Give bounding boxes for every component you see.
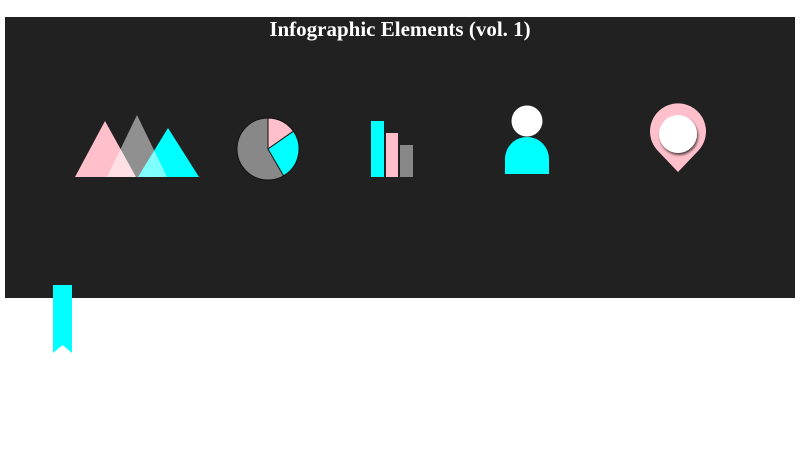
icon: pie chart <box>237 118 299 180</box>
title: Infographic Elements (vol. 1) <box>269 17 531 41</box>
icon: bookmark ribbon <box>53 285 72 353</box>
icon: map pin <box>650 103 706 172</box>
icon: person <box>505 106 549 174</box>
panel: dark background <box>5 17 795 298</box>
icon: mountains <box>75 115 199 177</box>
icon: bar chart <box>371 121 413 177</box>
